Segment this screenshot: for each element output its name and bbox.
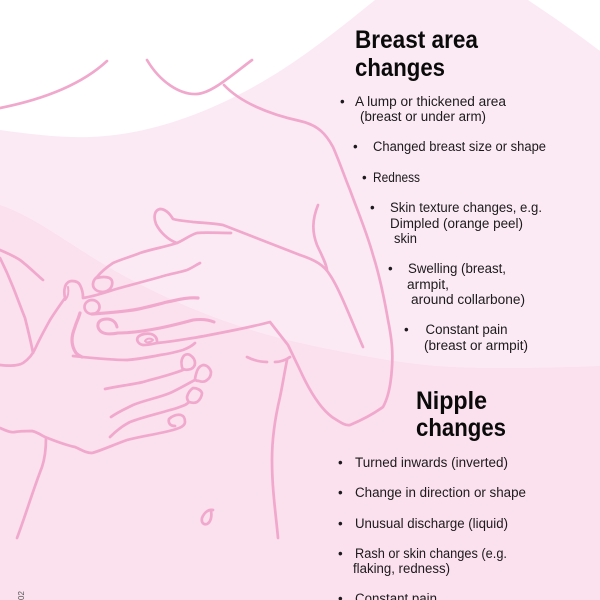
list: breast area changes [340, 94, 546, 353]
item: size or shape: • [353, 139, 358, 154]
item: constant pain: (breast or armpit) [424, 338, 528, 353]
lower hand first finger [105, 354, 195, 389]
item: change in direction: • [338, 485, 343, 500]
upper hand finger two [98, 319, 214, 334]
item: unusual discharge: • [338, 516, 343, 531]
item: lump [340, 94, 507, 124]
heading: breast area changes: Breast area [355, 26, 479, 54]
item: redness: • [362, 170, 367, 185]
item: skin texture: skin [394, 231, 417, 246]
upper hand middle finger [83, 263, 200, 298]
lower hand thumb and wrist [0, 281, 83, 366]
upper hand lower edge [73, 343, 195, 360]
item: lump: • [340, 94, 345, 109]
print code, rotated: 02 [17, 591, 26, 600]
thumb nail [65, 287, 68, 300]
list: nipple changes [338, 455, 526, 600]
left arm outer line [0, 258, 33, 353]
item: change in direction: Change in direction or shape [355, 485, 526, 500]
item: turned inwards: • [338, 455, 343, 470]
item: unusual discharge: Unusual discharge (liquid) [355, 516, 508, 531]
heading: nipple changes [416, 387, 506, 442]
palm edge of upper hand [72, 313, 82, 357]
heading: breast area changes [355, 26, 479, 82]
background: darker pink wave [0, 205, 600, 600]
item: rash: • [338, 546, 343, 561]
item: lump: A lump or thickened area [355, 94, 507, 109]
upper hand thumb [155, 209, 300, 255]
item: skin texture: • [370, 200, 375, 215]
left arm inner line [0, 250, 43, 280]
upper hand index finger [93, 233, 231, 292]
item: skin texture: Skin texture changes, e.g. [390, 200, 542, 215]
item: size or shape: Changed breast size or shape [373, 139, 546, 154]
illustration: woman examining her breast [0, 60, 392, 538]
navel [202, 510, 213, 524]
item: skin texture: Dimpled (orange peel) [390, 216, 523, 231]
item: constant pain: Constant pain [426, 322, 508, 337]
upper hand ring finger [92, 298, 198, 314]
chest crease left [247, 357, 267, 362]
item: swelling: around collarbone) [411, 292, 525, 307]
body left side [17, 438, 46, 538]
heading: nipple changes: changes [416, 414, 506, 442]
ring fingernail [84, 300, 100, 314]
left shoulder line [0, 61, 107, 108]
item: constant pain: • [404, 322, 409, 337]
item: swelling: armpit, [407, 277, 449, 292]
item: swelling: Swelling (breast, [408, 261, 506, 276]
item: rash: flaking, redness) [353, 561, 450, 576]
item: swelling [388, 261, 525, 307]
item: rash [338, 546, 507, 576]
body right side [272, 360, 287, 538]
item: redness: Redness [373, 170, 420, 185]
lower hand second finger [111, 365, 211, 417]
third fingernail [145, 339, 153, 342]
chest crease right [275, 357, 290, 362]
item: swelling: • [388, 261, 393, 276]
heading: nipple changes: Nipple [416, 387, 487, 415]
heading: breast area changes: changes [355, 54, 445, 82]
item: constant pain [404, 322, 528, 353]
inner arm crease [300, 205, 363, 347]
item: lump: (breast or under arm) [360, 109, 486, 124]
right arm outline [137, 85, 392, 425]
lower hand fourth finger and hand base [0, 415, 185, 453]
item: turned inwards: Turned inwards (inverted) [355, 455, 508, 470]
item: skin texture [370, 200, 542, 246]
lower hand third finger [110, 388, 202, 437]
neck and collarbone line [147, 60, 252, 94]
item: rash: Rash or skin changes (e.g. [355, 546, 507, 561]
